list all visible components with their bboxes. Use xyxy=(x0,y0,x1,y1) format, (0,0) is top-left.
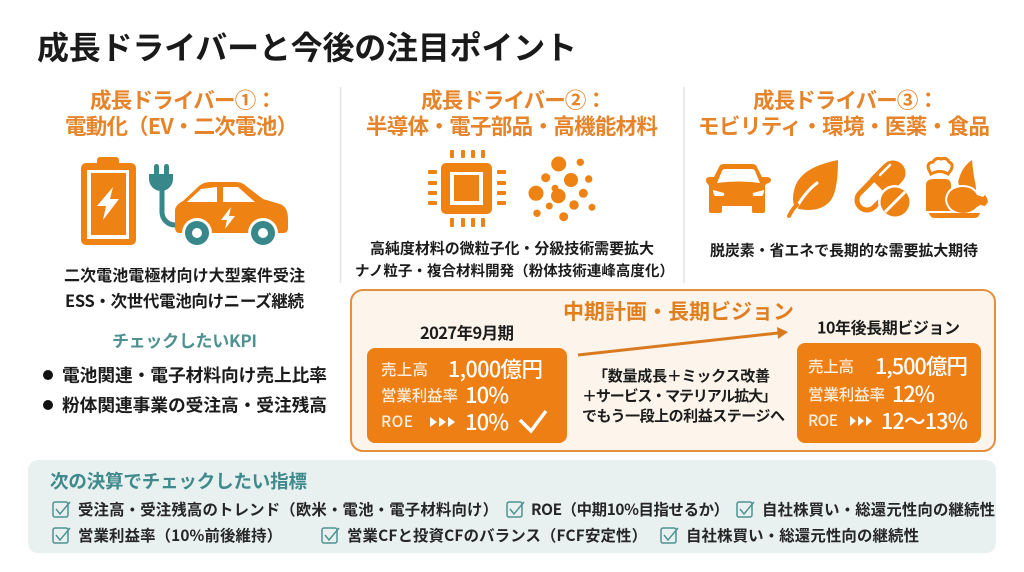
panel: mid-term plan and long-term vision xyxy=(351,290,995,451)
heading: driver 1: 電動化（EV・二次電池） xyxy=(65,110,298,141)
card: vision targets xyxy=(797,343,981,443)
card: vision targets: 12〜13% xyxy=(881,405,968,436)
card: vision targets: 営業利益率 xyxy=(808,383,885,405)
card: vision targets: ROE xyxy=(808,409,838,431)
text: driver 1 description: ESS・次世代電池向けニーズ継続 xyxy=(65,288,304,312)
heading: driver 2: 半導体・電子部品・高機能材料 xyxy=(366,110,658,141)
panel: driver 1 xyxy=(43,84,327,418)
checklist row 1: 受注高・受注残高のトレンド（欧米・電池・電子材料向け） xyxy=(78,498,498,520)
checklist row 2: 自社株買い・総還元性向の継続性 xyxy=(686,524,919,546)
card: vision targets: 売上高 xyxy=(808,355,854,377)
checklist row 1 xyxy=(53,498,995,520)
text: driver 2 description: 高純度材料の微粒子化・分級技術需要拡大 xyxy=(370,238,654,258)
checklist row 1: ROE（中期10%目指せるか） xyxy=(531,498,729,520)
icon: food xyxy=(926,158,988,218)
text: strategy: 「数量成長＋ミックス改善 xyxy=(593,365,770,386)
heading: driver 3 xyxy=(698,84,990,141)
text: driver 2 description: ナノ粒子・複合材料開発（粉体技術連峰高度化） xyxy=(355,260,674,281)
label: FY2027: 2027年9月期 xyxy=(420,320,514,344)
checklist row 2: 営業CFと投資CFのバランス（FCF安定性） xyxy=(347,524,647,546)
card: FY2027 targets: 売上高 xyxy=(381,358,428,380)
card: vision targets: 1,500億円 xyxy=(875,350,968,381)
panel: driver 3 xyxy=(698,84,990,260)
icon: chip xyxy=(428,150,506,227)
text: driver 1 description xyxy=(64,262,305,312)
checklist row 1: 自社株買い・総還元性向の継続性 xyxy=(762,498,995,520)
icon: chevrons xyxy=(850,416,872,426)
card: FY2027 targets: ROE xyxy=(381,410,413,432)
icon: check mark xyxy=(520,411,546,431)
heading: checklist: 次の決算でチェックしたい指標 xyxy=(50,468,307,494)
subheading: KPI: チェックしたいKPI xyxy=(112,327,257,352)
icon: electric car xyxy=(175,182,288,248)
card: vision targets: 12% xyxy=(892,378,935,409)
card: FY2027 targets: 1,000億円 xyxy=(448,353,543,384)
icon: battery xyxy=(81,157,136,245)
text: strategy xyxy=(582,365,785,426)
text: driver 3 description: 脱炭素・省エネで長期的な需要拡大期待 xyxy=(710,240,978,260)
text: driver 1 description: 二次電池電極材向け大型案件受注 xyxy=(64,262,305,286)
panel: next earnings checklist xyxy=(28,460,996,553)
text: strategy: ＋サービス・マテリアル拡大」 xyxy=(582,385,777,406)
heading: driver 3: 成長ドライバー③： xyxy=(753,84,939,115)
checklist row 2 xyxy=(53,524,919,546)
panel: driver 2 xyxy=(355,84,674,281)
card: FY2027 targets xyxy=(367,348,567,443)
card: FY2027 targets: 10% xyxy=(465,405,509,437)
card: FY2027 targets: 営業利益率 xyxy=(381,384,458,406)
icon: capsule and tablet xyxy=(867,165,912,219)
KPI list xyxy=(43,362,327,418)
title: 成長ドライバーと今後の注目ポイント xyxy=(37,23,577,69)
icon: chevrons xyxy=(430,417,455,427)
heading: driver 1 xyxy=(65,84,298,141)
checklist row 2: 営業利益率（10%前後維持） xyxy=(78,524,282,546)
heading: driver 2 xyxy=(366,84,658,141)
text: driver 2 description xyxy=(355,238,674,281)
icon: leaf xyxy=(789,160,838,216)
heading: driver 3: モビリティ・環境・医薬・食品 xyxy=(698,110,990,141)
heading: driver 2: 成長ドライバー②： xyxy=(421,84,607,115)
arrow xyxy=(578,327,788,355)
heading: plan: 中期計画・長期ビジョン xyxy=(563,296,794,326)
label: 10-year vision: 10年後長期ビジョン xyxy=(817,314,960,338)
icon: plug and cord xyxy=(149,164,181,225)
heading: driver 1: 成長ドライバー①： xyxy=(90,84,277,115)
KPI list: 粉体関連事業の受注高・受注残高 xyxy=(62,392,327,418)
icon: car front xyxy=(706,164,771,213)
text: strategy: でもう一段上の利益ステージへ xyxy=(582,405,785,426)
KPI list: 電池関連・電子材料向け売上比率 xyxy=(62,362,327,388)
icon: particles xyxy=(528,156,596,221)
card: FY2027 targets: 10% xyxy=(465,378,509,410)
